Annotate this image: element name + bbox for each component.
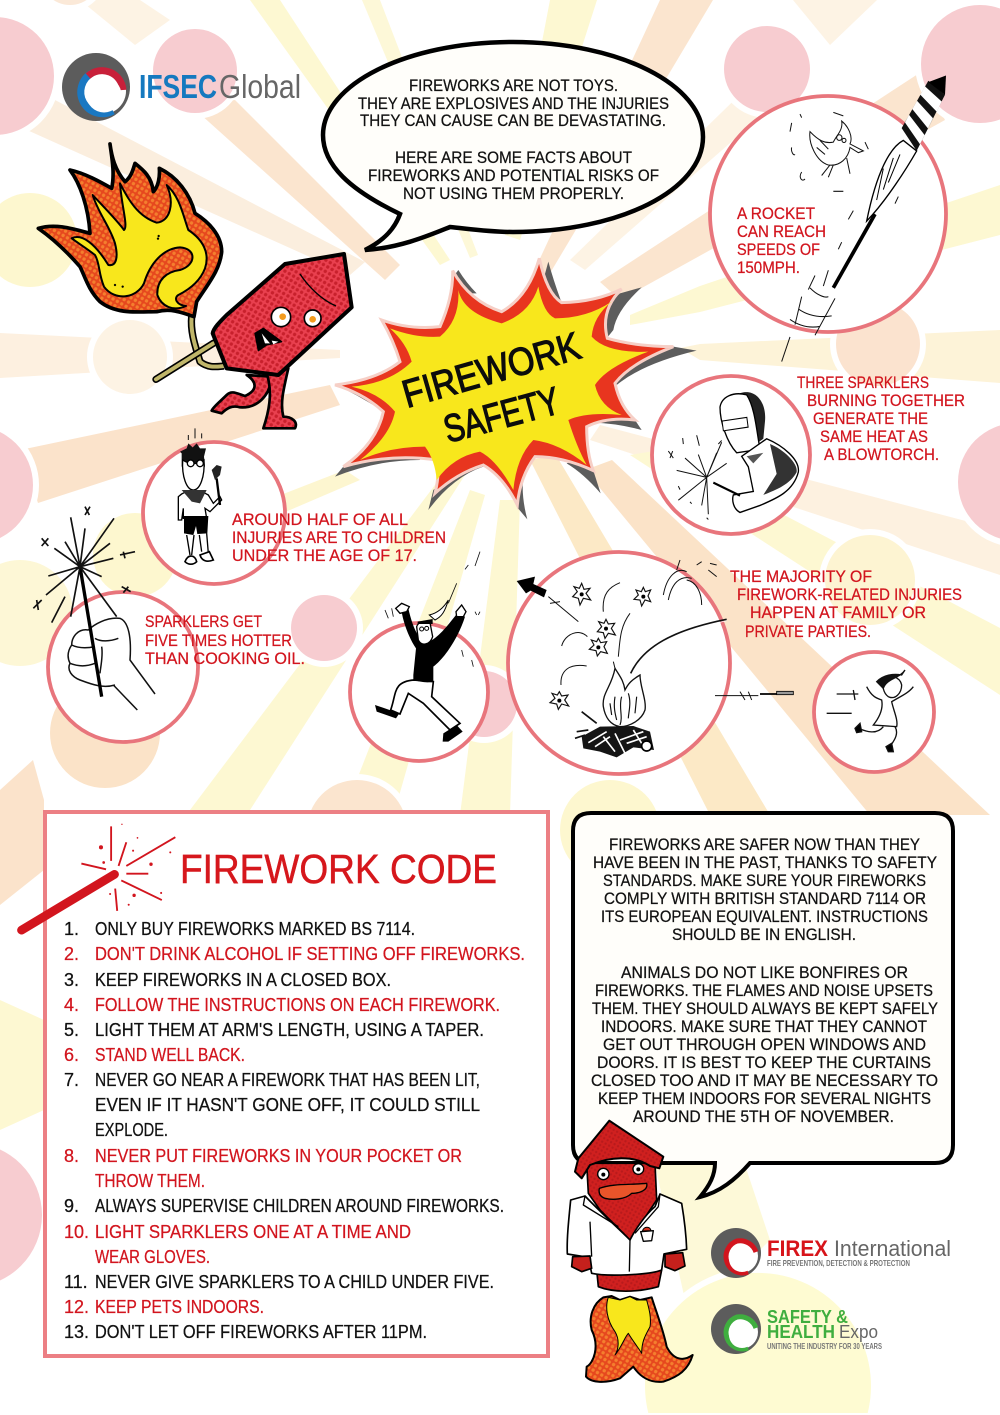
speech bubble: safety standards and animals: SHOULD BE IN ENGLISH. [672,925,856,944]
icon: match stick [156,317,224,379]
logo: IFSEC Global [62,53,301,121]
list: code items: STAND WELL BACK. [95,1045,245,1065]
logo: Safety & Health Expo: SAFETY & [767,1307,848,1327]
list: code items: 8. [64,1146,79,1166]
list: code items: EXPLODE. [95,1120,168,1140]
speech bubble: safety standards and animals: AROUND THE 5TH OF NOVEMBER. [633,1107,894,1126]
text: sparklers heat fact [797,373,965,464]
text: parties fact: THE MAJORITY OF [730,567,872,586]
speech bubble: safety standards and animals: ANIMALS DO NOT LIKE BONFIRES OR [621,963,908,982]
text: sparklers heat fact: SAME HEAT AS [820,427,928,446]
icon: bird [790,112,868,191]
speech bubble: safety standards and animals: DOORS. IT IS BEST TO KEEP THE CURTAINS [597,1053,931,1072]
burst: firework safety title: SAFETY [439,380,564,452]
speech bubble: safety standards and animals: KEEP THEM INDOORS FOR SEVERAL NIGHTS [598,1089,931,1108]
list: code items: 11. [64,1272,88,1292]
list: code items: DON'T LET OFF FIREWORKS AFTER 11PM. [95,1322,427,1342]
list: code items: NEVER PUT FIREWORKS IN YOUR POCKET OR [95,1146,462,1166]
icon: hands [572,1253,685,1272]
speech bubble: intro: NOT USING THEM PROPERLY. [403,184,624,203]
icon: hand holding sparkler [33,507,155,710]
logo: Safety & Health Expo: HEALTH [767,1322,835,1342]
speech bubble: intro: FIREWORKS AND POTENTIAL RISKS OF [368,166,659,185]
circle: rocket [710,75,946,362]
logo: Safety & Health Expo: Expo [839,1322,878,1342]
list: code items: THROW THEM. [95,1171,205,1191]
logo: FIREX International [711,1228,951,1278]
list: code items: EVEN IF IT HASN'T GONE OFF, IT COULD STILL [95,1095,480,1115]
text: parties fact: PRIVATE PARTIES. [745,622,871,641]
character: running firecracker with lit flame [38,144,352,428]
icon: sparkler [22,824,175,930]
list: code items: FOLLOW THE INSTRUCTIONS ON EACH FIREWORK. [95,995,500,1015]
speech bubble: intro: FIREWORKS ARE NOT TOYS. [409,76,618,95]
speech bubble: intro [323,42,703,250]
heading: firework code: FIREWORK CODE [180,846,497,892]
logo: IFSEC Global: Global [219,68,301,105]
speech bubble: safety standards and animals: CLOSED TOO AND IT MAY BE NECESSARY TO [591,1071,938,1090]
speech bubble: intro: THEY ARE EXPLOSIVES AND THE INJURIES [358,94,669,113]
text: children fact: INJURIES ARE TO CHILDREN [232,528,446,547]
list: code items: LIGHT THEM AT ARM'S LENGTH, USING A TAPER. [95,1020,484,1040]
text: rocket fact: 150MPH. [737,258,800,277]
list: code items: KEEP FIREWORKS IN A CLOSED BOX. [95,970,391,990]
text: sparkler temperature fact: THAN COOKING OIL. [145,649,305,668]
burst: firework safety title [335,258,697,519]
text: rocket fact: A ROCKET [737,204,815,223]
logo: Safety & Health Expo: UNITING THE INDUSTRY FOR 30 YEARS [767,1342,882,1351]
text: sparklers heat fact: BURNING TOGETHER [807,391,965,410]
speech bubble: safety standards and animals: ITS EUROPEAN EQUIVALENT. INSTRUCTIONS [601,907,928,926]
icon: welder with sparks [668,392,798,519]
list: code items: 5. [64,1020,79,1040]
icon: lab coat [567,1194,687,1275]
text: sparkler temperature fact: FIVE TIMES HOTTER [145,631,292,650]
list: code items: 10. [64,1222,89,1242]
icon: head cone [575,1121,663,1178]
list: code items: ONLY BUY FIREWORKS MARKED BS 7114. [95,919,415,939]
circle: scared girl [814,652,934,772]
logo: IFSEC Global: IFSEC [139,68,217,105]
list: code items: 7. [64,1070,79,1090]
list: code items: 2. [64,944,79,964]
text: parties fact: HAPPEN AT FAMILY OR [750,603,926,622]
text: children fact: UNDER THE AGE OF 17. [232,546,417,565]
text: parties fact [730,567,962,641]
speech bubble: safety standards and animals: FIREWORKS. THE FLAMES AND NOISE UPSETS [595,981,933,1000]
icon: firecracker body [213,254,352,375]
burst: firework safety title: FIREWORK [398,325,585,417]
icon: firecracker legs [212,368,296,428]
logo: FIREX International: FIREX [767,1236,828,1261]
circle: welder [652,373,965,534]
list: code items: LIGHT SPARKLERS ONE AT A TIME AND [95,1222,411,1242]
list: code items: KEEP PETS INDOORS. [95,1297,264,1317]
list: code items: 3. [64,970,79,990]
speech bubble: safety standards and animals: INDOORS. MAKE SURE THAT THEY CANNOT [601,1017,927,1036]
icon: flame [38,144,222,317]
logo: FIREX International: International [834,1236,951,1261]
text: sparklers heat fact: GENERATE THE [813,409,928,428]
speech bubble: safety standards and animals: STANDARDS. MAKE SURE YOUR FIREWORKS [603,871,926,890]
text: sparkler temperature fact: SPARKLERS GET [145,612,262,631]
speech bubble: intro: HERE ARE SOME FACTS ABOUT [395,148,632,167]
text: sparklers heat fact: A BLOWTORCH. [824,445,939,464]
circle: hand with sparkler [33,507,305,742]
speech bubble: safety standards and animals: HAVE BEEN IN THE PAST, THANKS TO SAFETY [593,853,937,872]
list: code items: 9. [64,1196,79,1216]
text: sparkler temperature fact [145,612,305,668]
speech bubble: safety standards and animals: FIREWORKS ARE SAFER NOW THAN THEY [609,835,920,854]
list: code items: 6. [64,1045,79,1065]
list: code items: NEVER GIVE SPARKLERS TO A CHILD UNDER FIVE. [95,1272,494,1292]
icon: rocket firework [782,75,946,362]
icon: arrow [517,577,547,597]
speech bubble: intro: THEY CAN CAUSE CAN BE DEVASTATING. [360,111,666,130]
text: rocket fact: CAN REACH [737,222,826,241]
icon: base [597,1270,662,1291]
list: code items: 1. [64,919,79,939]
icon: rocket exhaust flames [586,1296,693,1382]
text: children fact [232,510,446,565]
icon: bonfire with exploding fireworks [517,560,727,757]
logo: FIREX International: FIRE PREVENTION, DETECTION & PROTECTION [767,1258,910,1268]
speech bubble: safety standards and animals: COMPLY WITH BRITISH STANDARD 7114 OR [604,889,926,908]
list: code items: 4. [64,995,79,1015]
list: code items: WEAR GLOVES. [95,1247,210,1267]
speech bubble: safety standards and animals: GET OUT THROUGH OPEN WINDOWS AND [603,1035,926,1054]
list: code items: 12. [64,1297,89,1317]
icon: face [598,1168,609,1180]
text: rocket fact [737,204,826,277]
circle: panicking man [350,552,488,761]
logo: Safety & Health Expo [711,1304,882,1354]
icon: man with firework in hair [375,552,480,742]
list: code items: NEVER GO NEAR A FIREWORK THAT HAS BEEN LIT, [95,1070,480,1090]
circle: bonfire [508,552,962,774]
list: code items: DON'T DRINK ALCOHOL IF SETTING OFF FIREWORKS. [95,944,525,964]
icon: girl running [827,670,913,752]
text: sparklers heat fact: THREE SPARKLERS [797,373,929,392]
speech bubble: safety standards and animals [573,813,953,1197]
list: code items [64,919,525,1342]
list: code items: ALWAYS SUPERVISE CHILDREN AROUND FIREWORKS. [95,1196,504,1216]
text: parties fact: FIREWORK-RELATED INJURIES [737,585,962,604]
speech bubble: safety standards and animals: THEM. THEY SHOULD ALWAYS BE KEPT SAFELY [592,999,938,1018]
circle: burned child [143,428,446,584]
list: code items: 13. [64,1322,89,1342]
icon: stray rocket [715,691,793,700]
icon: child holding sparkler [178,428,222,564]
text: children fact: AROUND HALF OF ALL [232,510,408,529]
character: rocket scientist in lab coat [567,1121,693,1382]
icon: head [587,1163,657,1240]
text: rocket fact: SPEEDS OF [737,240,820,259]
panel: firework code [22,812,548,1356]
